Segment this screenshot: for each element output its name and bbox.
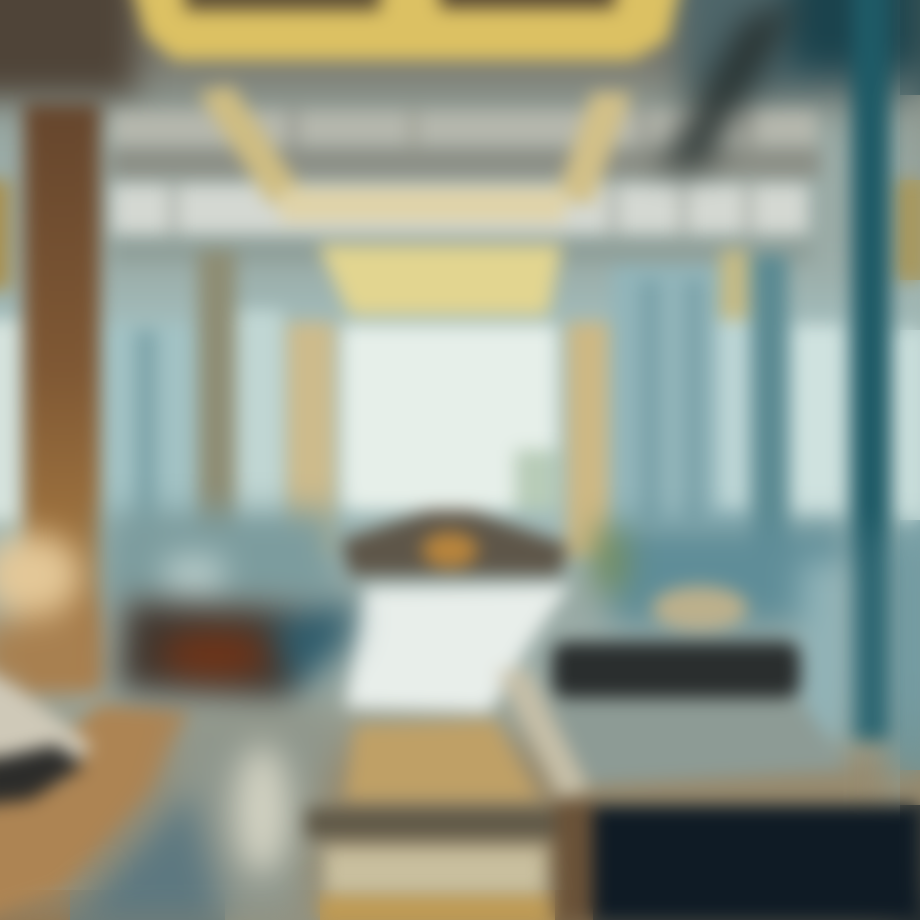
bottom right dark block [555,800,920,920]
left window panels [0,310,283,530]
white floor reflection [345,585,570,712]
right window panels [612,255,920,555]
yellow ceiling panel above window [318,245,562,315]
ceiling pale stripes [110,108,820,264]
lower left glass wall [105,510,335,600]
left seating area [118,555,352,700]
grey blue carpet [70,715,340,920]
left wooden column [24,105,100,690]
right black sofa [552,586,800,698]
foreground left object [0,665,92,805]
plant [594,524,626,596]
foreground lamp [0,533,95,690]
foreground wooden floor left [0,705,190,920]
ceiling warm beams [198,85,632,222]
right white sofa base [497,668,850,798]
center window [342,325,557,510]
lower right glass wall [610,525,920,770]
distant sofa with orange accent [342,510,568,575]
ceiling yellow frame [130,0,682,60]
central wood table [305,720,555,920]
mid columns [0,180,920,557]
dark ceiling diagonal beam [660,0,800,170]
right teal column [852,0,890,740]
ceiling dark upper section [0,0,920,95]
